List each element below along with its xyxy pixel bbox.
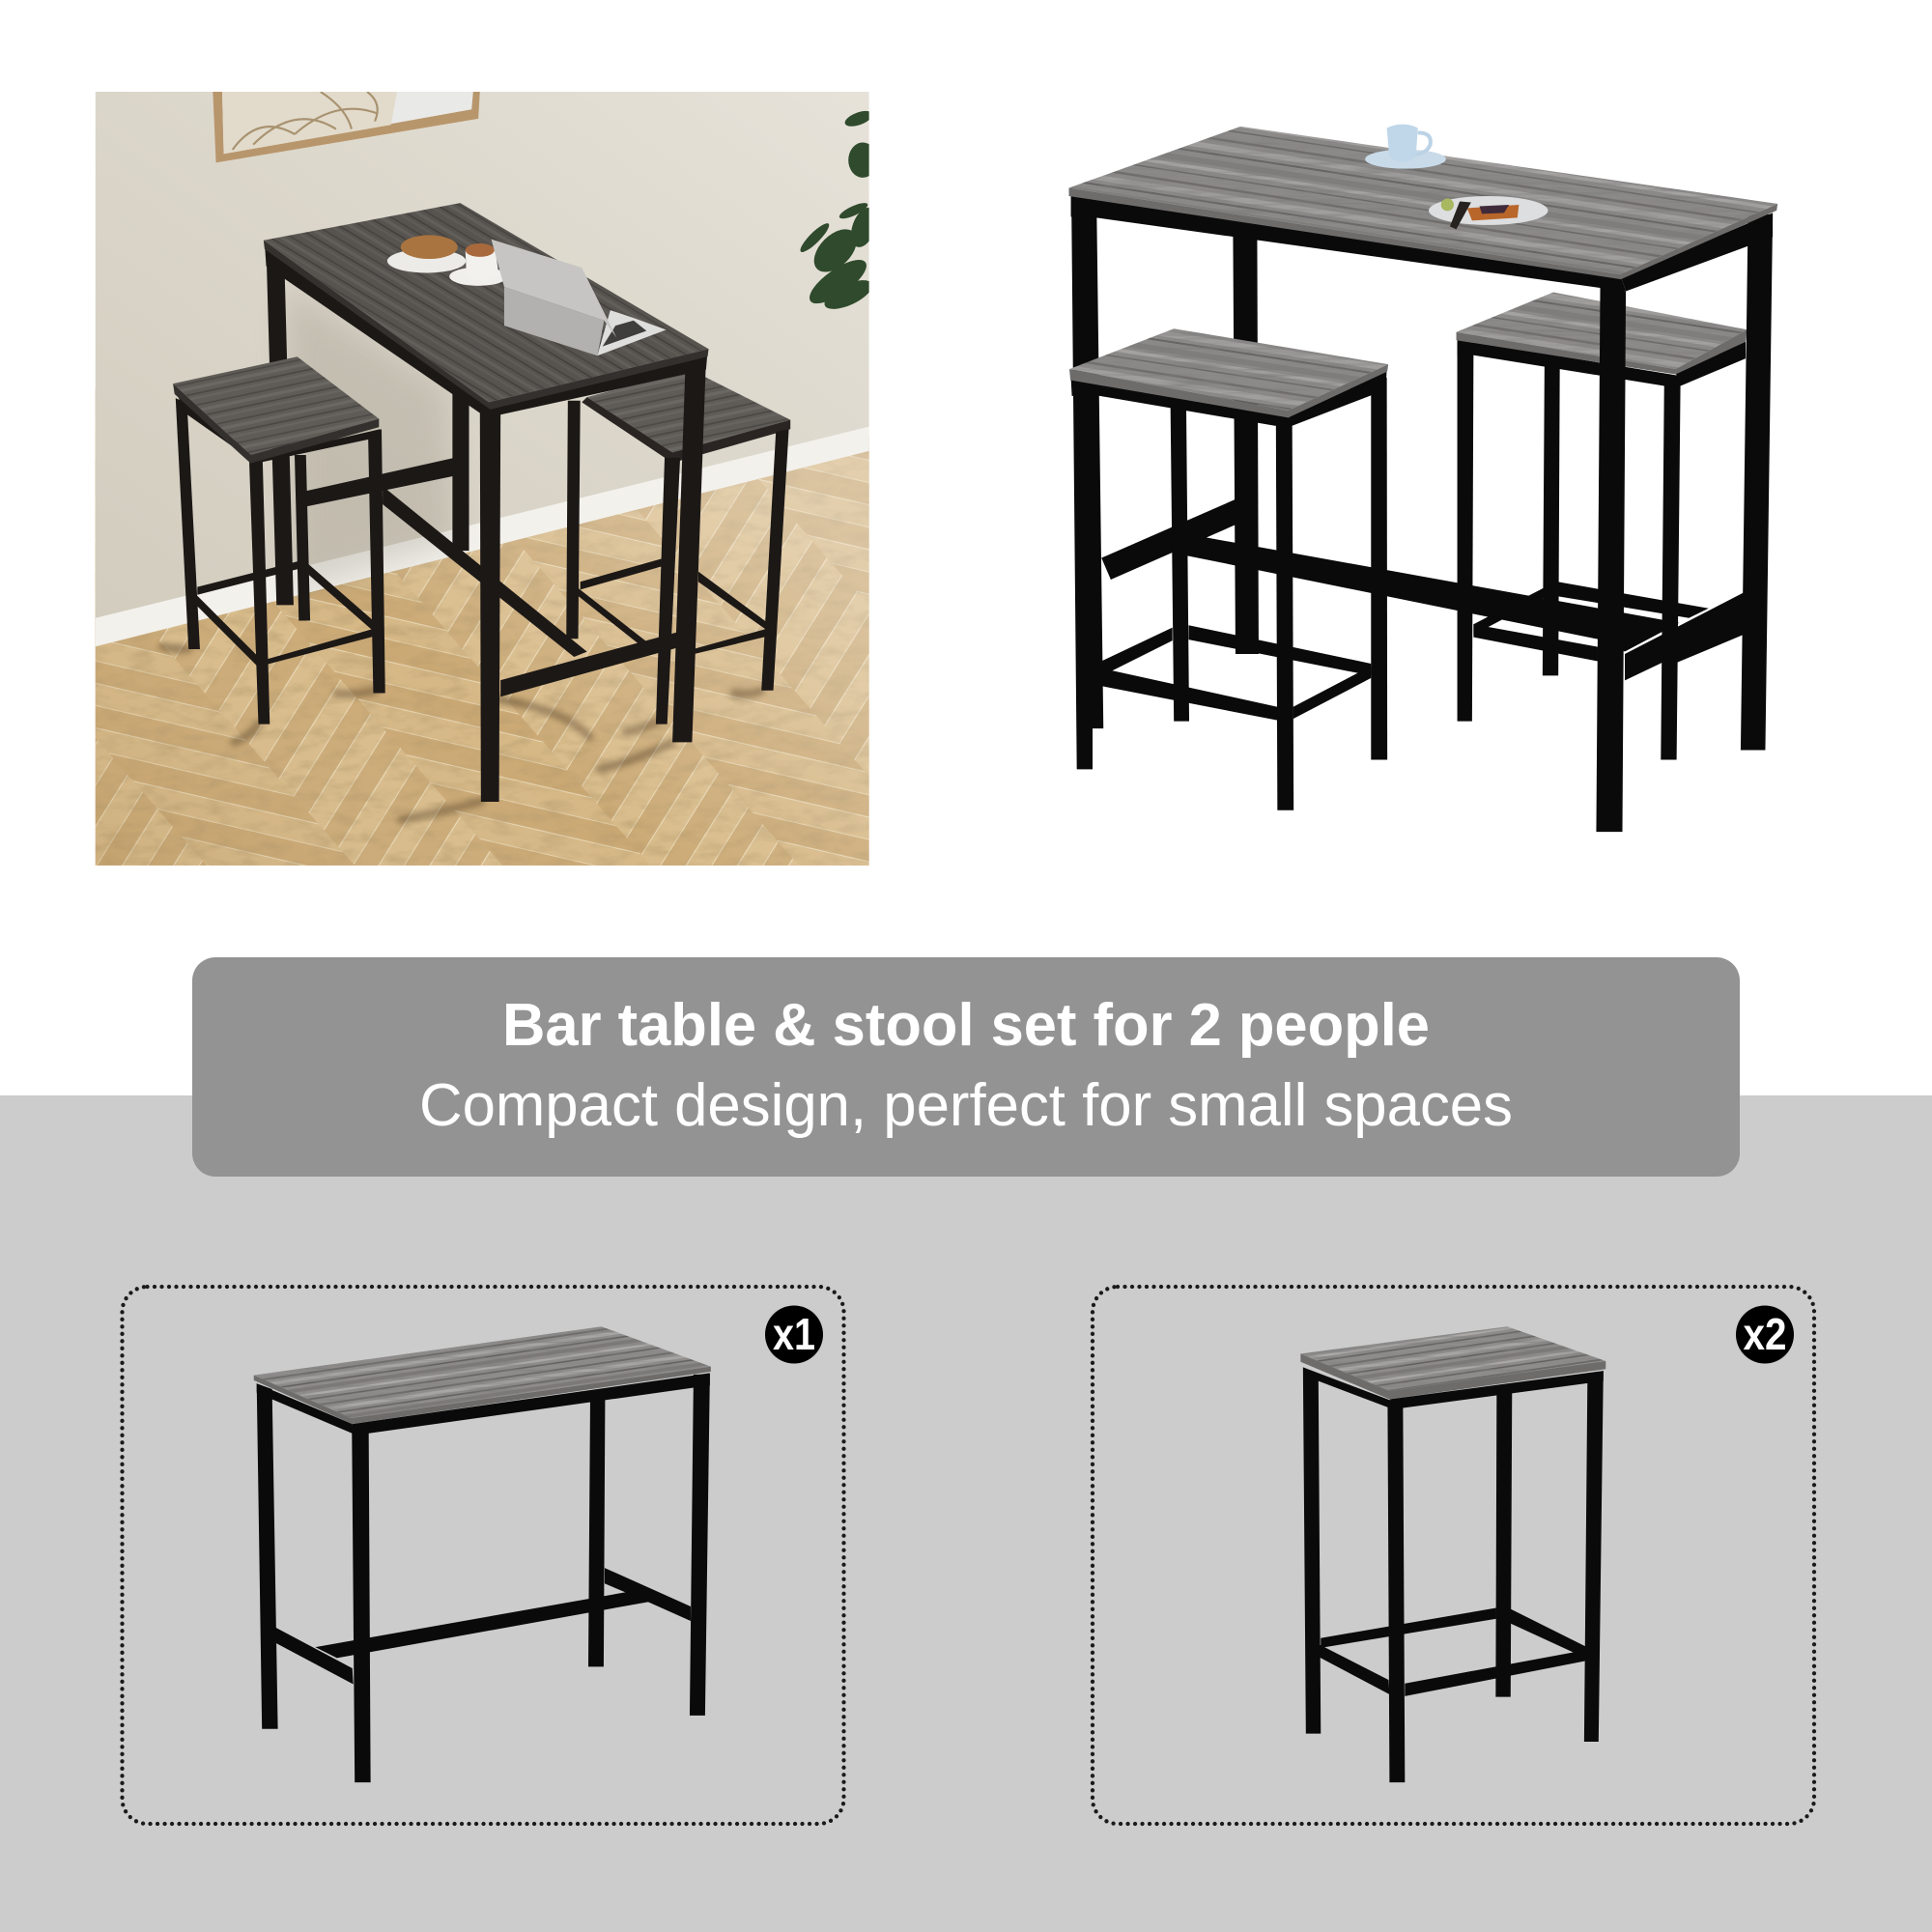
wall shadow bbox=[284, 284, 455, 595]
panel: stool component bbox=[1093, 1287, 1814, 1824]
near stool bbox=[1069, 328, 1388, 810]
table illustration bbox=[254, 1326, 711, 1782]
far stool bbox=[1457, 292, 1747, 759]
floor shadows bbox=[162, 646, 761, 820]
table front leg bbox=[1596, 287, 1626, 832]
plate with toast bbox=[1429, 196, 1548, 229]
table in scene bbox=[264, 203, 709, 802]
banner heading: Bar table & stool set for 2 people bbox=[502, 992, 1430, 1059]
tablet and keyboard bbox=[492, 240, 667, 355]
table frame bbox=[1071, 196, 1773, 769]
banner bbox=[192, 957, 1740, 1177]
grey lower section bbox=[0, 1095, 1932, 1932]
stool illustration bbox=[1300, 1326, 1605, 1782]
badge x1: x1 bbox=[773, 1309, 815, 1359]
wall above floor bbox=[96, 92, 869, 646]
panel: product set on white bbox=[1069, 125, 1777, 832]
far stool in scene bbox=[566, 370, 790, 724]
panel: room scene photo bbox=[95, 92, 869, 866]
panel: table component bbox=[122, 1287, 844, 1824]
near stool in scene bbox=[173, 356, 385, 724]
badge x2: x2 bbox=[1743, 1309, 1787, 1359]
floor bbox=[95, 387, 869, 866]
baseboard bbox=[96, 427, 869, 646]
framed art bbox=[213, 92, 480, 162]
banner subheading: Compact design, perfect for small spaces bbox=[419, 1072, 1513, 1139]
table top bbox=[1069, 127, 1777, 279]
cup and saucer bbox=[1365, 125, 1446, 169]
plant leaves bbox=[800, 110, 869, 309]
food and cups on table bbox=[387, 235, 507, 286]
back table leg bbox=[1233, 236, 1259, 654]
